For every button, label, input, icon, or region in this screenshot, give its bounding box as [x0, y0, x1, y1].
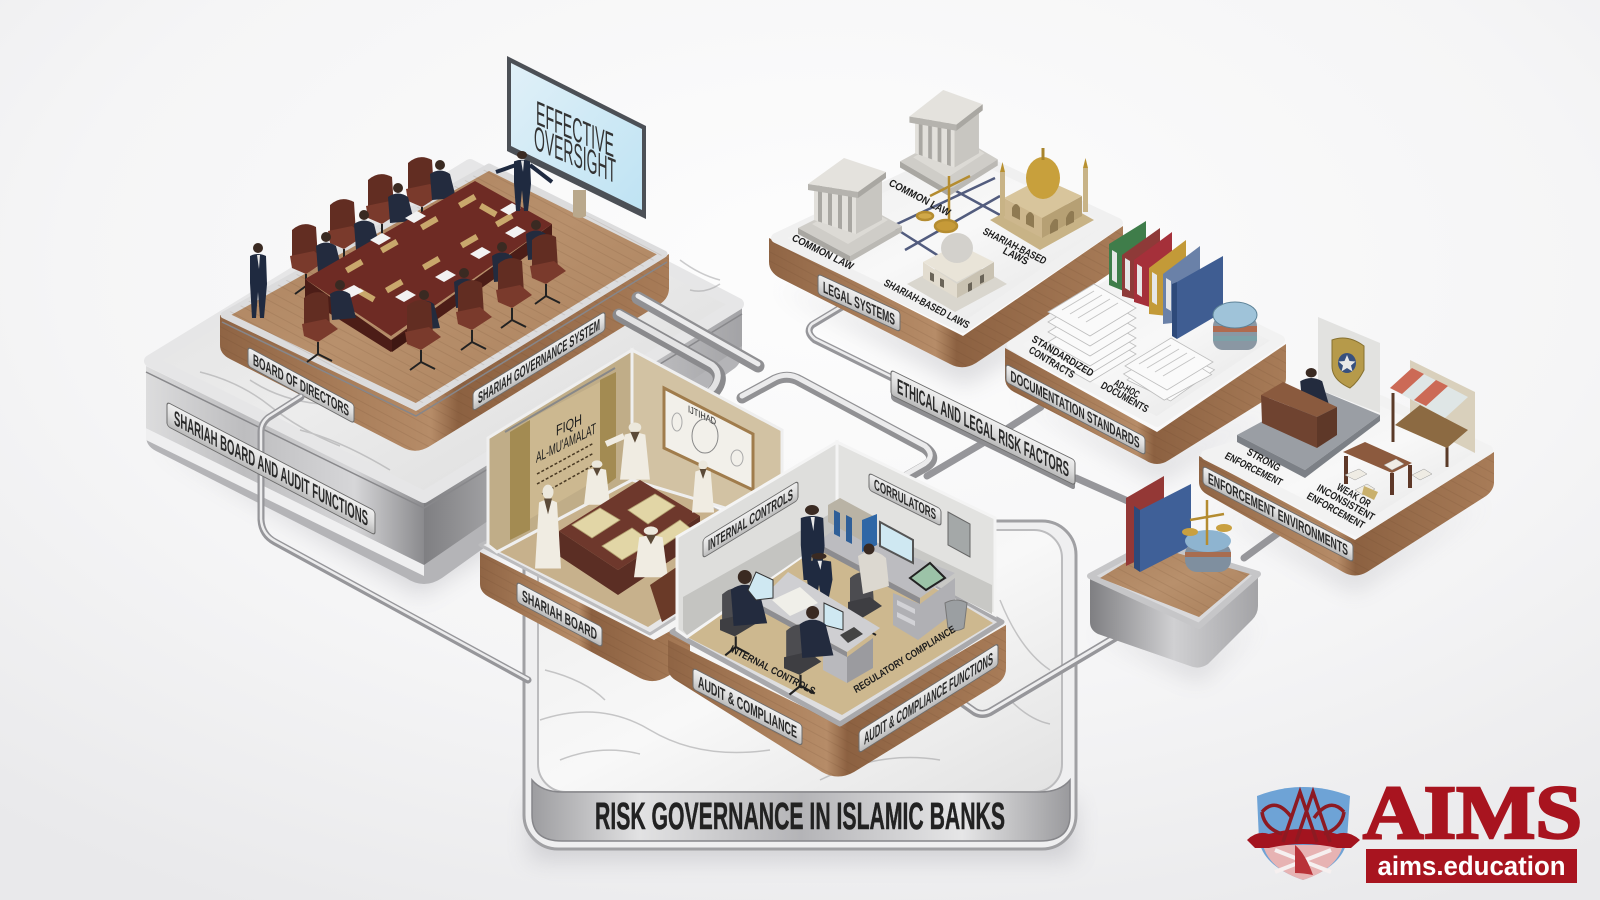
- label: board of directors: BOARD OF DIRECTORS: [253, 351, 349, 420]
- laptop left: [748, 572, 773, 600]
- front desk: [757, 572, 880, 683]
- standing man centre: [807, 553, 832, 602]
- text: shariah-based laws right: [981, 225, 1049, 267]
- text: regulatory compliance floor: REGULATORY COMPLIANCE: [852, 623, 957, 695]
- fiqh banner: [528, 382, 600, 520]
- curtains: [505, 368, 616, 540]
- pipe: risk factors to room: [927, 443, 983, 476]
- standing scholar: [606, 422, 650, 480]
- seated people back row: [316, 160, 456, 272]
- logo url box: aims.education: [1378, 851, 1566, 881]
- screen: effective oversight: OVERSIGHT: [534, 118, 616, 191]
- seated worker right: [848, 544, 889, 636]
- wood base: [769, 226, 1123, 367]
- label: legal systems: [818, 274, 900, 332]
- panel: board of directors platform: [220, 56, 669, 451]
- panel: audit and compliance room: [668, 442, 1006, 776]
- pipe: board to main platform: [261, 397, 528, 680]
- back desk with cabinet: [817, 527, 955, 640]
- standing auditor back: [801, 505, 825, 580]
- panel: enforcement environments: [1199, 317, 1494, 576]
- grey podium: [1237, 390, 1380, 478]
- people front row: [330, 220, 552, 330]
- panel: board of directors platform: SHARIAH GOVERNANCE SYSTEM: [478, 315, 600, 408]
- label: audit and compliance functions: [859, 643, 998, 753]
- tablet: [910, 563, 945, 590]
- panel: Shariah board and audit functions silver base: [146, 165, 742, 584]
- text: shariah-based laws right: LAWS: [1001, 245, 1031, 267]
- fiqh banner: FIQH: [556, 412, 582, 440]
- scholar near whiteboard: [692, 460, 714, 512]
- label: legal systems: LEGAL SYSTEMS: [823, 278, 895, 329]
- label: documentation standards: DOCUMENTATION STANDARDS: [1011, 367, 1140, 452]
- label: Shariah board and audit functions: [167, 402, 375, 535]
- label: audit and compliance: [693, 668, 802, 746]
- text: standardized contracts: CONTRACTS: [1027, 344, 1077, 381]
- wood base: [1199, 452, 1494, 576]
- text: standardized contracts: [1027, 333, 1096, 381]
- left wall: [488, 350, 632, 552]
- text: weak or inconsistent enforcement: ENFORCEMENT: [1305, 490, 1367, 531]
- pipe: connecting loop: [742, 377, 932, 478]
- wood base: [480, 552, 690, 681]
- marble top: [1012, 268, 1280, 422]
- marble top: [776, 150, 1118, 328]
- text: ad-hoc documents: DOCUMENTS: [1099, 379, 1151, 415]
- label: shariah governance system: [473, 311, 605, 411]
- wood sides: [220, 254, 669, 451]
- market stall: [1390, 360, 1475, 467]
- icon: binders: [1109, 221, 1223, 339]
- text: shariah-based laws front: SHARIAH-BASED LAWS: [882, 277, 972, 331]
- wood base: [668, 625, 1006, 776]
- text: standardized contracts: STANDARDIZED: [1030, 333, 1096, 379]
- building: front court: [798, 158, 902, 262]
- navy floor lines: [880, 178, 1000, 260]
- panel: Shariah board room: [480, 350, 790, 681]
- marble veins: [200, 260, 720, 470]
- label: shariah board: SHARIAH BOARD: [522, 587, 597, 644]
- logo: AIMS: [1247, 771, 1582, 883]
- pipe: big governance pipe: [619, 315, 719, 405]
- panel: documentation standards: [1005, 221, 1286, 464]
- laptop front: [824, 603, 843, 630]
- text: ETHICAL AND LEGAL RISK FACTORS: [897, 374, 1069, 482]
- building: mosque white dome: [907, 233, 1007, 312]
- binders on desk: [828, 498, 877, 552]
- seated scholar front: [634, 526, 678, 622]
- label: corrulators wall: CORRULATORS: [874, 477, 936, 524]
- pipe: audit to block: [958, 624, 1138, 714]
- floor: [687, 530, 993, 715]
- text: weak or inconsistent enforcement: [1305, 481, 1377, 531]
- label: corrulators wall: [869, 473, 941, 526]
- standing man with document: [250, 243, 267, 318]
- small messy desk: [1343, 442, 1432, 500]
- screen: effective oversight: EFFECTIVE: [536, 93, 614, 165]
- building: back court: [900, 90, 998, 196]
- logo shield: [1247, 787, 1360, 880]
- label: audit and compliance: AUDIT & COMPLIANCE: [698, 672, 797, 742]
- calculator on wall: [948, 512, 970, 557]
- text: internal controls floor: INTERNAL CONTROLS: [728, 643, 817, 697]
- floor: [500, 470, 782, 627]
- text: common law front: COMMON LAW: [790, 232, 856, 272]
- whiteboard: [664, 388, 753, 490]
- icon: gold scales: [917, 176, 970, 232]
- right wall: [632, 350, 782, 525]
- whiteboard: IJTIHAD: [688, 403, 716, 428]
- chrome pipes: [261, 296, 1281, 714]
- title: RISK GOVERNANCE IN ISLAMIC BANKS: [595, 796, 1005, 838]
- pipe: legal systems: [809, 307, 892, 378]
- judge desk: [1261, 368, 1337, 448]
- marble veins: [540, 600, 1050, 780]
- text: strong enforcement: STRONG: [1245, 446, 1283, 474]
- pipe: upper governance pipe: [638, 298, 758, 366]
- seated worker left: [720, 570, 767, 655]
- chrome rim: [672, 530, 1002, 724]
- icon: coin stack and scales: [1182, 500, 1232, 572]
- presenter: [496, 151, 552, 211]
- text: strong enforcement: [1223, 446, 1285, 488]
- wood top: [224, 167, 664, 407]
- screen: effective oversight: [507, 56, 646, 219]
- text: SHARIAH BOARD AND AUDIT FUNCTIONS: [174, 406, 368, 531]
- title band: [532, 780, 1070, 841]
- text: strong enforcement: ENFORCEMENT: [1223, 450, 1285, 488]
- standing scholar left: [535, 485, 561, 568]
- panel: main platform risk governance in Islamic banks: [524, 521, 1076, 849]
- seated worker front: [784, 606, 833, 695]
- panel: small silver block with binders and scales: [1090, 476, 1258, 668]
- marble top: [1206, 400, 1488, 532]
- text: ad-hoc documents: [1099, 377, 1151, 415]
- panel: legal systems: [769, 90, 1123, 367]
- monitor: [880, 522, 913, 563]
- police wall with badge: [1318, 317, 1380, 413]
- text: AUDIT & COMPLIANCE FUNCTIONS: [864, 648, 993, 749]
- chairs front row: [302, 234, 566, 370]
- text: common law back: COMMON LAW: [887, 177, 953, 219]
- label: internal controls wall: INTERNAL CONTROLS: [708, 485, 793, 555]
- wastebasket: [945, 600, 967, 630]
- scholar seated: [584, 460, 610, 505]
- label: enforcement environments: ENFORCEMENT ENVIRONMENTS: [1208, 470, 1348, 560]
- icon: standardized contract stack: [1048, 284, 1136, 382]
- pipe: risk factors to block: [1076, 478, 1130, 502]
- icon: ad-hoc documents: [1122, 338, 1216, 404]
- pipe: documentation: [1005, 407, 1041, 430]
- label: internal controls wall: [703, 481, 798, 558]
- text: ad-hoc documents: AD-HOC: [1112, 377, 1142, 400]
- logo wordmark: AIMS: [1363, 771, 1582, 855]
- chrome rim: [480, 470, 790, 634]
- pipe: enforcement to block: [1244, 531, 1281, 558]
- label: shariah board: [517, 582, 602, 647]
- soft shadows: [150, 285, 1490, 860]
- wood base: [1005, 344, 1286, 464]
- label: board of directors: [248, 347, 354, 423]
- icon: coin stack: [1213, 302, 1257, 350]
- left wall: [677, 442, 837, 637]
- label: enforcement environments: [1203, 466, 1353, 562]
- table with scrolls: [559, 480, 700, 595]
- icon: binders: [1126, 476, 1191, 572]
- fiqh banner: AL-MU'AMALAT: [536, 421, 596, 467]
- text: weak or inconsistent enforcement: INCONSISTENT: [1315, 482, 1377, 523]
- building: gold dome mosque: [990, 148, 1094, 250]
- label: documentation standards: [1006, 364, 1145, 455]
- right wall: [837, 442, 995, 615]
- chairs back row: [290, 157, 442, 294]
- conference table: [305, 181, 552, 352]
- text: weak or inconsistent enforcement: WEAK OR: [1335, 481, 1373, 510]
- label: ethical and legal risk factors: [891, 370, 1075, 490]
- text: shariah-based laws right: SHARIAH-BASED: [981, 225, 1049, 267]
